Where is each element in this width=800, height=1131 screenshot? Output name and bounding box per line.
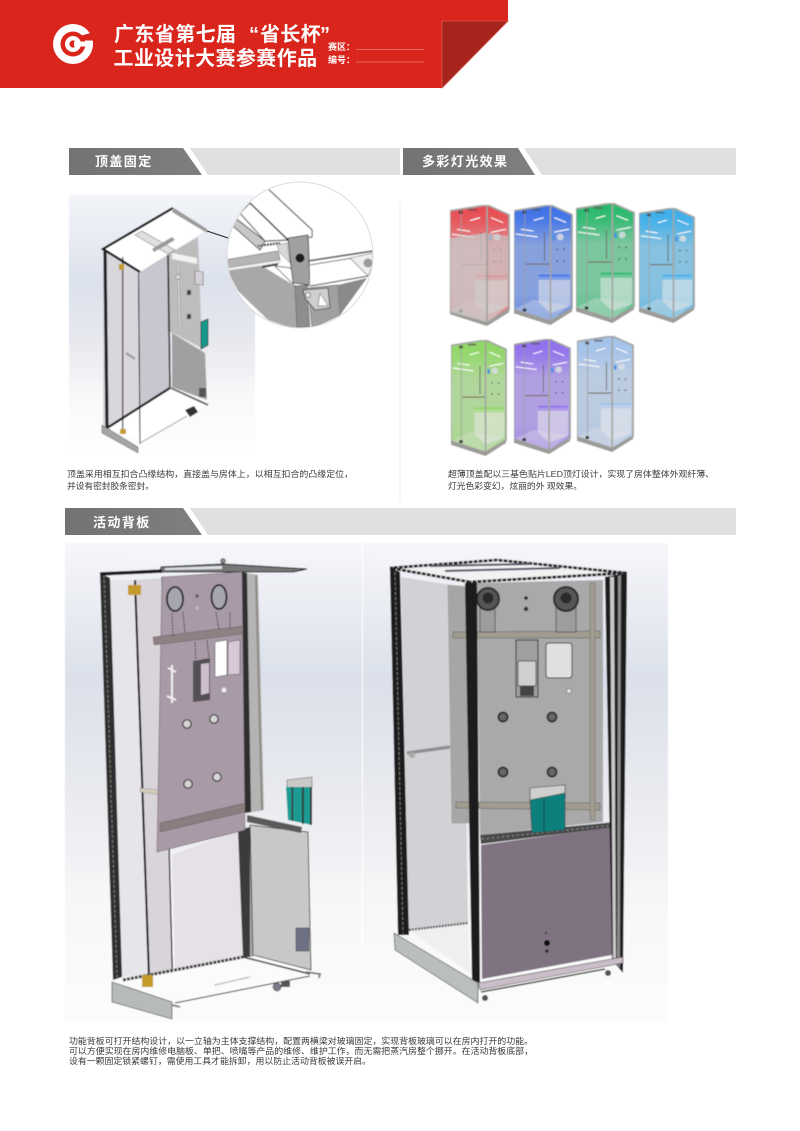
front post (465, 582, 480, 983)
opened door lower panel (247, 815, 311, 970)
panel: open back panel illustration (65, 543, 362, 1022)
panel background (69, 195, 255, 459)
cabin: pale blue light (577, 336, 633, 452)
heading: 活动背板: 活动背板 (93, 515, 151, 530)
cabin: lime light (451, 340, 506, 456)
lower panel (480, 822, 615, 979)
text block: top cover caption (67, 468, 353, 491)
form field labels: 赛区： (328, 41, 355, 52)
heading: 多彩灯光效果 (403, 148, 736, 175)
teal cartridge (530, 785, 565, 833)
title: 广东省第七届“省长杯” (114, 22, 330, 46)
right posts (238, 572, 264, 957)
floor and threshold (112, 957, 320, 1019)
cabin: cyan light (639, 208, 694, 323)
main back panel (453, 580, 603, 835)
panel background (65, 543, 362, 1022)
form field labels: 编号： (328, 54, 355, 65)
top lid (100, 559, 307, 574)
cabin render (102, 208, 208, 453)
teal cartridge (286, 777, 312, 825)
header banner (0, 0, 508, 88)
text block: top cover caption: 并设有密封胶条密封。 (67, 480, 154, 491)
text block: back panel caption (69, 1035, 533, 1066)
banner: folded corner (442, 21, 508, 88)
form field labels (328, 41, 424, 65)
icon: competition logo (53, 24, 94, 64)
callout: circular detail of cover seam (225, 182, 373, 330)
text block: back panel caption: 可以方便实现在房内维修电脑板、单把、喷嘴等产品的维修、维护工作，而无需把蒸汽房整个挪开。在活动背板底部， (69, 1045, 533, 1056)
cabin: red light (450, 205, 509, 326)
right posts (605, 573, 627, 973)
text block: top cover caption: 顶盖采用相互扣合凸缘结构，直接盖与房体上，以相互扣合的凸缘定位， (67, 468, 353, 479)
heading: 多彩灯光效果: 多彩灯光效果 (422, 154, 508, 169)
text block: lighting caption (448, 468, 714, 491)
callout: leader line to detail (207, 231, 228, 238)
lower crossbar (160, 803, 245, 832)
panel: closed back panel illustration (363, 543, 668, 1022)
text block: back panel caption: 设有一颗固定锁紧螺钉，需使用工具才能拆卸，用以防止活动背板被误开启。 (69, 1055, 371, 1066)
cabin left wall and frame (100, 573, 243, 997)
text block: lighting caption: 超薄顶盖配以三基色贴片LED顶灯设计，实现了房体整体外观纤薄、 (448, 468, 714, 479)
chart: coloured lighting shower cabins (450, 203, 694, 456)
heading: 顶盖固定: 顶盖固定 (95, 154, 153, 169)
threshold and base rail (394, 933, 623, 1003)
panel background (363, 543, 668, 1022)
title (114, 22, 330, 70)
panel: top cover illustration (69, 195, 255, 459)
heading: 活动背板 (65, 508, 736, 535)
text block: lighting caption: 灯光色彩变幻，炫丽的外 观效果。 (448, 480, 582, 491)
left glass wall (390, 568, 470, 973)
back panel (153, 572, 245, 852)
banner: red ribbon (0, 0, 508, 88)
lower crossbar (456, 802, 600, 810)
heading: 顶盖固定 (69, 148, 400, 175)
cabin: green light (576, 203, 634, 323)
title: 工业设计大赛参赛作品 (114, 46, 318, 70)
roof (390, 560, 627, 582)
cabin: purple light (514, 339, 570, 454)
upper crossbar (153, 626, 243, 645)
text block: back panel caption: 功能背板可打开结构设计，以一立轴为主体支撑结构，配置两横梁对玻璃固定，实现背板玻璃可以在房内打开的功能。 (69, 1035, 533, 1046)
upper crossbar (453, 631, 600, 638)
cabin: blue light (514, 205, 572, 325)
